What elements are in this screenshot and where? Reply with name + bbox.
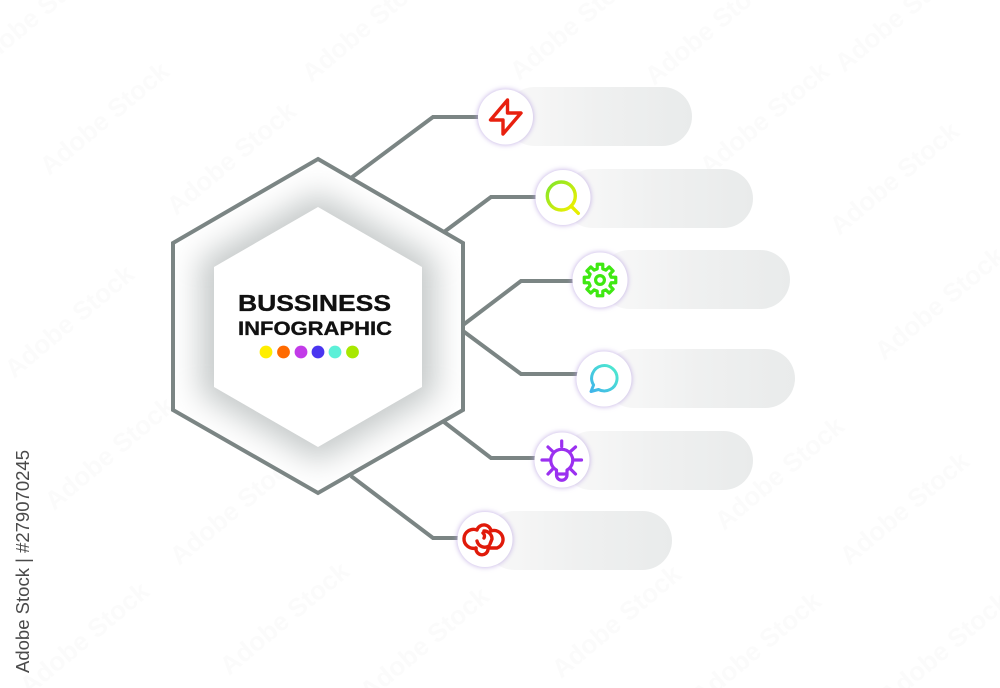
panel: item 5 bbox=[534, 431, 753, 490]
watermark pattern: Adobe Stock bbox=[824, 115, 965, 241]
pill 3 bbox=[600, 250, 790, 309]
icon: light bulb bbox=[542, 441, 582, 480]
watermark pattern: Adobe Stock bbox=[0, 258, 140, 384]
panel: item 2 bbox=[536, 169, 753, 228]
connector lines bbox=[351, 117, 580, 538]
badge 4 bbox=[576, 352, 632, 406]
watermark pattern: Adobe Stock bbox=[161, 95, 302, 221]
colour dots bbox=[260, 346, 359, 358]
panel: item 6 bbox=[458, 511, 672, 570]
panel: item 3 bbox=[572, 250, 790, 309]
watermark pattern: Adobe Stock bbox=[709, 410, 850, 536]
watermark pattern: Adobe Stock bbox=[834, 445, 975, 571]
watermark pattern: Adobe Stock bbox=[34, 55, 175, 181]
icon: magnifier bbox=[547, 182, 578, 213]
panel: item 4 bbox=[576, 349, 795, 408]
badge 2 bbox=[536, 170, 590, 225]
pill 4 bbox=[604, 349, 795, 408]
pill 2 bbox=[563, 169, 753, 228]
icon: lightning bolt bbox=[490, 100, 521, 134]
watermark pattern: Adobe Stock bbox=[546, 558, 687, 684]
badge 6 bbox=[458, 512, 512, 567]
central hexagon bbox=[173, 159, 463, 493]
pill 5 bbox=[562, 431, 753, 490]
icon: cloud bbox=[464, 525, 503, 555]
hexagon shaded ring bbox=[185, 182, 451, 472]
pill 1 bbox=[505, 87, 692, 146]
title line 1: BUSSINESS bbox=[238, 290, 391, 316]
pill 6 bbox=[485, 511, 672, 570]
badge 3 bbox=[572, 252, 628, 308]
hexagon inner white face bbox=[214, 207, 422, 447]
panel: item 1 bbox=[478, 87, 692, 146]
hexagon outline bbox=[173, 159, 463, 493]
watermark pattern: Adobe Stock bbox=[214, 555, 355, 681]
watermark pattern: Adobe Stock bbox=[39, 390, 180, 516]
side credit text: Adobe Stock | #279070245 bbox=[13, 450, 33, 673]
badge 1 bbox=[478, 90, 533, 144]
title bbox=[238, 290, 392, 340]
title line 2: INFOGRAPHIC bbox=[238, 318, 392, 340]
icon: gear bbox=[584, 264, 616, 296]
watermark pattern: Adobe Stock bbox=[164, 445, 305, 571]
badge 5 bbox=[534, 432, 590, 488]
watermark pattern: Adobe Stock bbox=[694, 55, 835, 181]
icon: chat bubble bbox=[591, 366, 617, 392]
